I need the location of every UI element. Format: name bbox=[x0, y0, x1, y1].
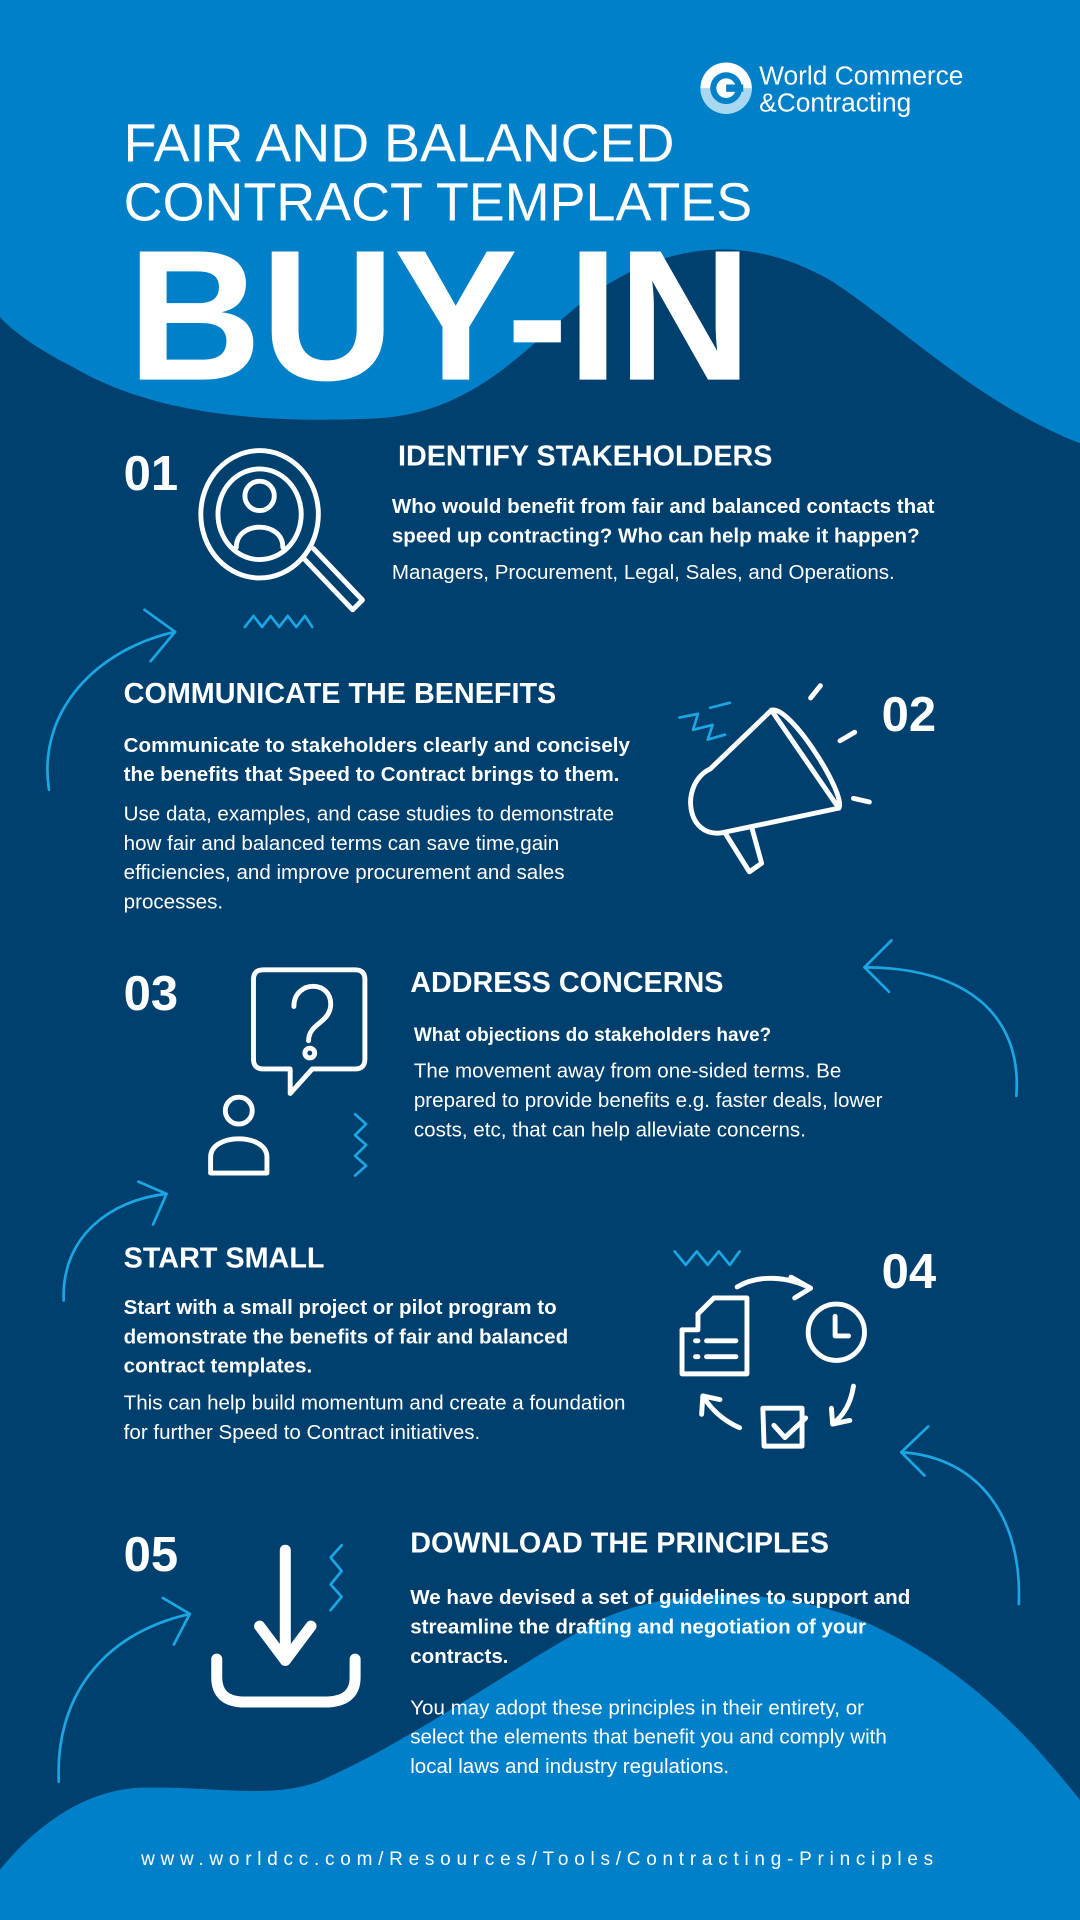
logo: &Contracting bbox=[759, 87, 911, 117]
step 02: efficiencies, and improve procurement and sales bbox=[124, 861, 564, 884]
step 05: DOWNLOAD THE PRINCIPLES bbox=[410, 1528, 829, 1560]
big heading BUY-IN: BUY-IN bbox=[127, 213, 751, 420]
step 04: This can help build momentum and create a foundation bbox=[124, 1391, 625, 1414]
step 05: local laws and industry regulations. bbox=[410, 1755, 729, 1778]
step 04: START SMALL bbox=[124, 1242, 324, 1274]
step 04: 04 bbox=[882, 1245, 936, 1299]
step 05: 05 bbox=[124, 1528, 178, 1582]
step 01 bbox=[124, 440, 935, 627]
step 03: The movement away from one-sided terms. Be bbox=[414, 1060, 841, 1083]
arrow 5 bbox=[59, 1598, 190, 1782]
step 02: 02 bbox=[882, 688, 936, 742]
step 04 bbox=[124, 1242, 936, 1446]
step 01: Managers, Procurement, Legal, Sales, and Operations. bbox=[392, 561, 895, 584]
logo bbox=[700, 60, 963, 117]
step 05: streamline the drafting and negotiation of your bbox=[410, 1615, 866, 1638]
bottom wave background bbox=[0, 1595, 1080, 1920]
step 01: Who would benefit from fair and balanced contacts that bbox=[392, 495, 935, 518]
arrow 4 bbox=[901, 1427, 1019, 1604]
step 05 bbox=[124, 1528, 910, 1778]
step 02: Communicate to stakeholders clearly and concisely bbox=[124, 734, 630, 757]
zigzag bbox=[245, 616, 312, 627]
step 02: processes. bbox=[124, 891, 223, 914]
step 05: select the elements that benefit you and comply with bbox=[410, 1726, 887, 1749]
step 04: contract templates. bbox=[124, 1355, 312, 1378]
step 01: 01 bbox=[124, 447, 178, 501]
top wave background bbox=[0, 0, 1080, 443]
step 02 bbox=[124, 678, 936, 914]
step 01: IDENTIFY STAKEHOLDERS bbox=[398, 440, 772, 472]
step 05: contracts. bbox=[410, 1645, 508, 1668]
step 02: Use data, examples, and case studies to demonstrate bbox=[124, 802, 614, 825]
step 03: prepared to provide benefits e.g. faster deals, lower bbox=[414, 1089, 883, 1112]
step 05: We have devised a set of guidelines to support and bbox=[410, 1586, 910, 1609]
step 03: costs, etc, that can help alleviate concerns. bbox=[414, 1118, 806, 1141]
step 02: COMMUNICATE THE BENEFITS bbox=[124, 678, 556, 710]
step 05: You may adopt these principles in their entirety, or bbox=[410, 1696, 864, 1719]
icon: download bbox=[217, 1550, 355, 1702]
step 03 bbox=[124, 967, 883, 1176]
icon: megaphone bbox=[691, 686, 869, 872]
arrow 3 bbox=[64, 1182, 167, 1300]
icon: question and person bbox=[211, 970, 365, 1173]
icon: magnifier person bbox=[201, 451, 362, 610]
icon: cycle bbox=[682, 1277, 864, 1446]
step 02: how fair and balanced terms can save time,gain bbox=[124, 832, 559, 855]
arrow 1 bbox=[47, 610, 175, 790]
arrow 2 bbox=[864, 940, 1017, 1096]
title: CONTRACT TEMPLATES bbox=[124, 172, 752, 232]
step 03: What objections do stakeholders have? bbox=[414, 1025, 771, 1046]
step 03: ADDRESS CONCERNS bbox=[410, 967, 723, 999]
title: FAIR AND BALANCED bbox=[124, 114, 674, 174]
step 04: Start with a small project or pilot program to bbox=[124, 1296, 557, 1319]
footer url: www.worldcc.com/Resources/Tools/Contracting-Principles bbox=[140, 1849, 939, 1870]
step 04: demonstrate the benefits of fair and balanced bbox=[124, 1325, 568, 1348]
step 02: the benefits that Speed to Contract brings to them. bbox=[124, 763, 619, 786]
step 03: 03 bbox=[124, 967, 178, 1021]
title bbox=[124, 114, 752, 232]
logo: World Commerce bbox=[759, 60, 963, 90]
step 01: speed up contracting? Who can help make it happen? bbox=[392, 524, 920, 547]
step 04: for further Speed to Contract initiatives. bbox=[124, 1421, 480, 1444]
